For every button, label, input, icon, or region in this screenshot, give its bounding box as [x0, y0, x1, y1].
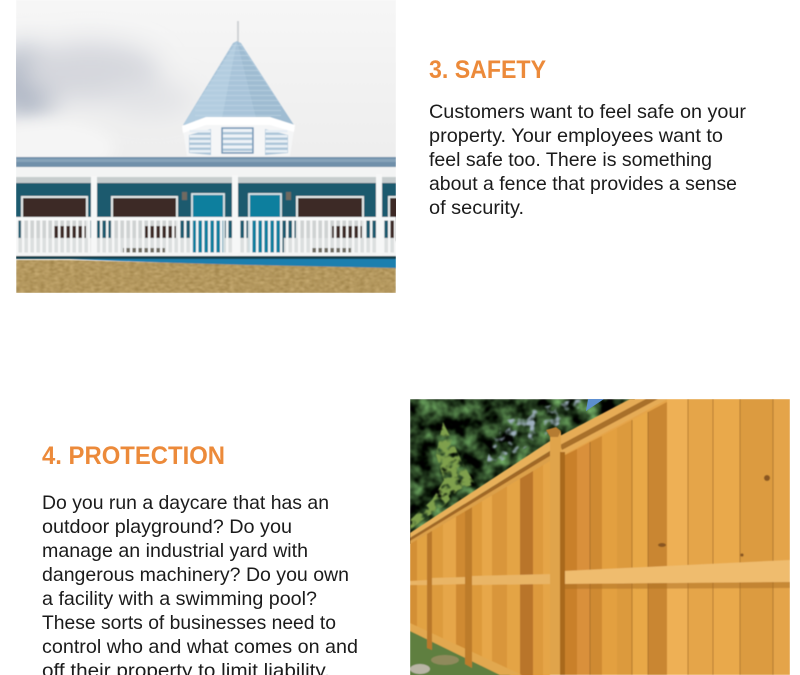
- text: safety paragraph: Customers want to feel safe on your: [429, 101, 747, 123]
- text: protection paragraph: outdoor playground? Do you: [42, 516, 292, 538]
- wall: [16, 183, 396, 258]
- main post: [550, 432, 561, 675]
- photo: wooden fence: [410, 399, 790, 675]
- far fence base: [410, 458, 548, 541]
- right boards: [565, 399, 790, 675]
- text: protection paragraph: dangerous machinery? Do you own: [42, 564, 349, 586]
- photo: building with cupola: [0, 0, 401, 294]
- sky corner: [586, 399, 604, 411]
- main roof: [16, 157, 396, 167]
- cupola collar: [182, 117, 295, 133]
- windows: [22, 197, 401, 242]
- heading: 3. Safety: 3. SAFETY: [429, 56, 546, 84]
- wood knots: [658, 475, 770, 557]
- conifer branch: [410, 422, 475, 530]
- cupola spire: [237, 21, 239, 43]
- white cloud: [16, 115, 56, 186]
- text: safety paragraph: property. Your employees want to: [429, 125, 723, 147]
- text: protection paragraph: control who and what comes on and: [42, 636, 358, 658]
- louvers: [189, 128, 288, 155]
- right board seams: [590, 399, 773, 675]
- far rails: [410, 574, 553, 585]
- sky gaps through foliage: [486, 399, 582, 463]
- railing rails: [16, 217, 396, 220]
- far bottom rail: [410, 623, 522, 675]
- cupola body: [186, 142, 291, 155]
- fascia: [74, 166, 396, 176]
- text: safety paragraph: [429, 101, 747, 219]
- grass: [410, 630, 520, 675]
- base strip: [16, 256, 396, 259]
- porch columns: [91, 174, 382, 257]
- post cap: [546, 427, 561, 437]
- far posts: [427, 496, 472, 668]
- heading: 4. Protection: 4. PROTECTION: [42, 442, 225, 470]
- window blinds: [23, 220, 362, 238]
- text: protection paragraph: These sorts of businesses need to: [42, 612, 336, 634]
- clouds: [0, 42, 195, 118]
- text: protection paragraph: manage an industrial yard with: [42, 540, 308, 562]
- sky: [16, 0, 396, 160]
- cupola roof: [183, 40, 294, 126]
- lawn: [16, 258, 396, 294]
- blue walkway: [70, 259, 396, 269]
- gravel: [410, 664, 430, 674]
- text: safety paragraph: of security.: [429, 197, 524, 219]
- doors: [192, 194, 281, 257]
- far boards: [410, 460, 550, 675]
- lower railing panels: [16, 238, 396, 255]
- railing balusters: [16, 218, 396, 254]
- wall lamps: [182, 192, 291, 200]
- trees background: [410, 399, 635, 544]
- right fence panel: [564, 399, 668, 456]
- text: safety paragraph: about a fence that provides a sense: [429, 173, 737, 195]
- text: protection paragraph: a facility with a swimming pool?: [42, 588, 317, 610]
- right horizontal rail: [563, 560, 790, 584]
- text: protection paragraph: [42, 492, 358, 675]
- foundation vents: [123, 248, 351, 254]
- text: safety paragraph: feel safe too. There is something: [429, 149, 712, 171]
- text: protection paragraph: Do you run a daycare that has an: [42, 492, 329, 514]
- top cap rail near: [556, 399, 668, 455]
- top cap rail far: [410, 441, 550, 538]
